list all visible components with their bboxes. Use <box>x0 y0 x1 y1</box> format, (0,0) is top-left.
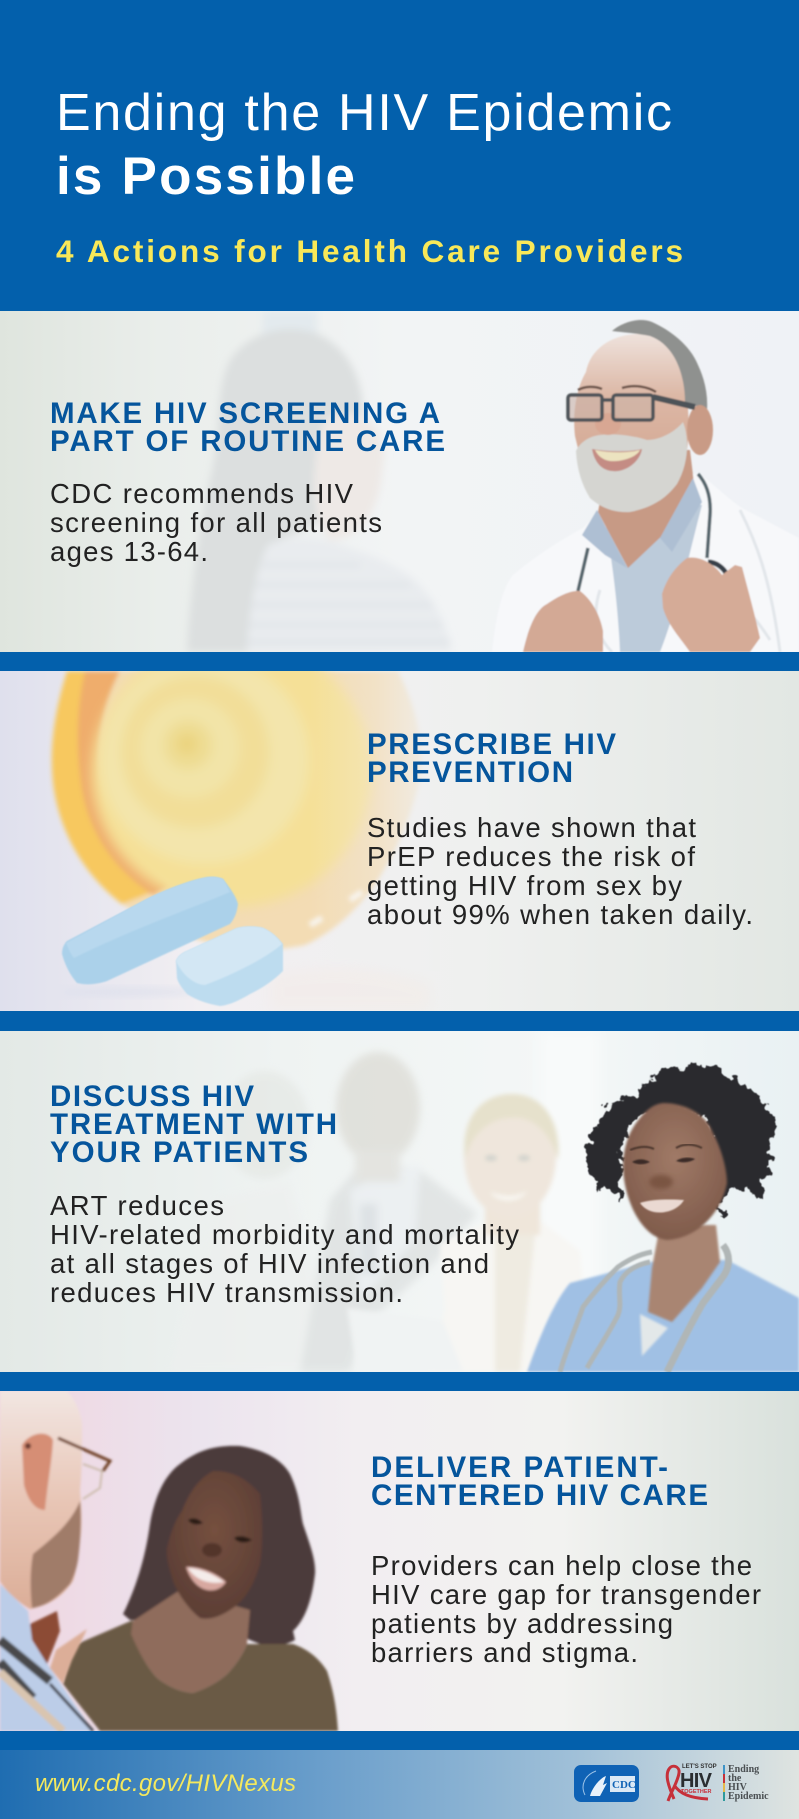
body text: screening for all patients <box>50 507 382 538</box>
body text <box>367 812 753 930</box>
body text: barriers and stigma. <box>371 1637 638 1668</box>
photo: smiling doctor <box>522 319 780 652</box>
heading <box>52 402 444 452</box>
icon: Let's Stop HIV Together logo: TOGETHER <box>681 1789 711 1795</box>
icon: Let's Stop HIV Together logo: HIV <box>680 1770 713 1792</box>
photo: pill bottle <box>48 671 421 950</box>
heading: PREVENTION <box>367 756 573 789</box>
body text: at all stages of HIV infection and <box>50 1248 489 1279</box>
heading: PRESCRIBE HIV <box>367 728 616 761</box>
photo: blurred care team <box>227 1050 560 1372</box>
body text: Studies have shown that <box>367 812 696 843</box>
icon: Ending the HIV Epidemic logo: HIV <box>728 1782 748 1793</box>
title: is Possible <box>56 147 355 206</box>
panel: prevention <box>0 637 799 1011</box>
body text <box>50 478 382 567</box>
panel: patient-centered care <box>0 1391 799 1731</box>
heading: PART OF ROUTINE CARE <box>50 425 445 458</box>
heading <box>368 733 616 782</box>
header banner <box>0 0 799 311</box>
heading: CENTERED HIV CARE <box>371 1479 708 1512</box>
body text: CDC recommends HIV <box>50 478 354 509</box>
body text <box>371 1550 761 1668</box>
body text <box>50 1190 519 1308</box>
body text: HIV-related morbidity and mortality <box>50 1219 519 1250</box>
heading: DISCUSS HIV <box>50 1080 254 1113</box>
body text: PrEP reduces the risk of <box>367 841 695 872</box>
body text: ages 13-64. <box>50 536 208 567</box>
heading: YOUR PATIENTS <box>50 1136 308 1169</box>
photo: woman smiling <box>63 1446 338 1731</box>
heading <box>372 1456 707 1506</box>
icon: Ending the HIV Epidemic logo: Epidemic <box>728 1791 769 1802</box>
body text: reduces HIV transmission. <box>50 1277 403 1308</box>
body text: getting HIV from sex by <box>367 870 682 901</box>
icon: CDC logo <box>574 1765 639 1802</box>
heading: MAKE HIV SCREENING A <box>50 397 440 430</box>
icon: Ending the HIV Epidemic logo: Ending <box>728 1764 759 1775</box>
heading <box>50 1085 336 1162</box>
icon: Ending the HIV Epidemic logo: the <box>728 1773 742 1784</box>
title <box>56 84 672 206</box>
body text: patients by addressing <box>371 1608 673 1639</box>
photo: blurred patient from behind <box>187 311 452 652</box>
panel: treatment <box>0 1031 799 1372</box>
photo: male provider from behind <box>0 1391 110 1731</box>
body text: ART reduces <box>50 1190 224 1221</box>
icon: Ending the HIV Epidemic logo <box>723 1764 769 1802</box>
website url: www.cdc.gov/HIVNexus <box>35 1770 296 1797</box>
panel: screening <box>0 311 799 652</box>
photo: smiling nurse <box>527 1065 799 1372</box>
body text: HIV care gap for transgender <box>371 1579 761 1610</box>
heading: DELIVER PATIENT- <box>371 1451 668 1484</box>
body text: about 99% when taken daily. <box>367 899 753 930</box>
icon: Let's Stop HIV Together logo: LET'S STOP <box>682 1764 717 1770</box>
icon: CDC logo: CDC <box>612 1779 636 1791</box>
icon: Let's Stop HIV Together logo <box>667 1764 717 1801</box>
title: Ending the HIV Epidemic <box>56 84 672 142</box>
body text: Providers can help close the <box>371 1550 752 1581</box>
heading: TREATMENT WITH <box>50 1108 337 1141</box>
footer <box>0 1750 799 1819</box>
photo: blue pills <box>60 877 283 1006</box>
subtitle: 4 Actions for Health Care Providers <box>56 233 683 269</box>
blue divider bands <box>0 652 799 1750</box>
